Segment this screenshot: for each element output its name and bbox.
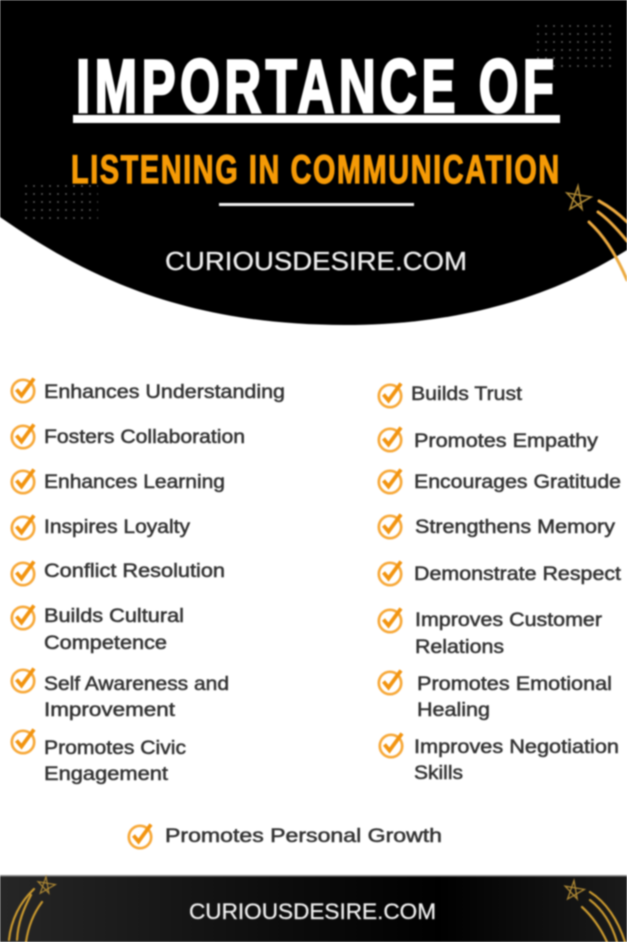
item: Improves Customer Relations [379,608,603,658]
item: Strengthens Memory: Strengthens Memory [415,517,616,538]
item: Improves Negotiation Skills: Improves Negotiation [414,737,619,758]
item: Conflict Resolution: Conflict Resolution [44,561,225,582]
item: Promotes Personal Growth: Promotes Personal Growth [165,826,442,847]
title underline [73,115,560,123]
item: Improves Negotiation Skills: Skills [414,763,463,784]
item: Builds Cultural Competence [12,606,184,654]
item: Improves Customer Relations: Improves Customer [415,610,603,631]
website label: header: CURIOUSDESIRE.COM [165,246,467,276]
item: Enhances Understanding [12,378,285,403]
item: Builds Trust [379,384,523,407]
item: Fosters Collaboration [12,424,245,448]
decorative dot grid: left [22,182,98,224]
item: Enhances Understanding: Enhances Understanding [44,382,285,403]
title: Importance of: IMPORTANCE OF [76,44,554,128]
item: Promotes Civic Engagement [12,730,186,785]
item: Self Awareness and Improvement [12,668,229,721]
item: Promotes Emotional Healing: Promotes Emotional [417,674,612,695]
item: Demonstrate Respect: Demonstrate Respect [414,564,622,585]
item: Encourages Gratitude [379,470,621,493]
icon: shooting star, footer right [565,881,625,942]
right checklist column [379,384,622,784]
header: black curved banner [0,0,627,325]
item: Enhances Learning [12,470,225,493]
item: Promotes Personal Growth [129,824,442,848]
item: Builds Cultural Competence: Competence [44,633,167,654]
item: Enhances Learning: Enhances Learning [44,472,225,493]
item: Promotes Civic Engagement: Engagement [44,764,169,785]
footer bar [0,875,627,942]
item: Promotes Empathy: Promotes Empathy [414,431,599,452]
website label: footer: CURIOUSDESIRE.COM [189,899,436,924]
item: Strengthens Memory [379,514,616,538]
icon: shooting star, footer left [9,877,55,942]
item: Promotes Emotional Healing [379,670,612,721]
item: Conflict Resolution [12,561,225,585]
item: Inspires Loyalty [12,516,191,539]
item: Builds Trust: Builds Trust [411,384,523,405]
item: Demonstrate Respect [379,562,622,585]
item: Promotes Emotional Healing: Healing [417,700,490,721]
icon: shooting star, header [567,186,627,280]
item: Inspires Loyalty: Inspires Loyalty [44,517,191,538]
item: Fosters Collaboration: Fosters Collaboration [44,427,245,448]
item: Encourages Gratitude: Encourages Gratitude [414,472,621,493]
item: Promotes Civic Engagement: Promotes Civic [44,738,186,759]
item: Self Awareness and Improvement: Improvement [44,700,176,721]
item: Self Awareness and Improvement: Self Awareness and [44,674,229,695]
left checklist column [12,378,285,785]
short divider line [219,203,414,206]
decorative dot grid: top right [532,21,613,67]
item: Improves Customer Relations: Relations [415,637,504,658]
item: Improves Negotiation Skills [380,734,619,784]
subtitle: Listening in Communication: LISTENING IN COMMUNICATION [71,147,559,192]
item: Promotes Empathy [379,428,599,452]
item: Builds Cultural Competence: Builds Cultural [44,606,184,627]
